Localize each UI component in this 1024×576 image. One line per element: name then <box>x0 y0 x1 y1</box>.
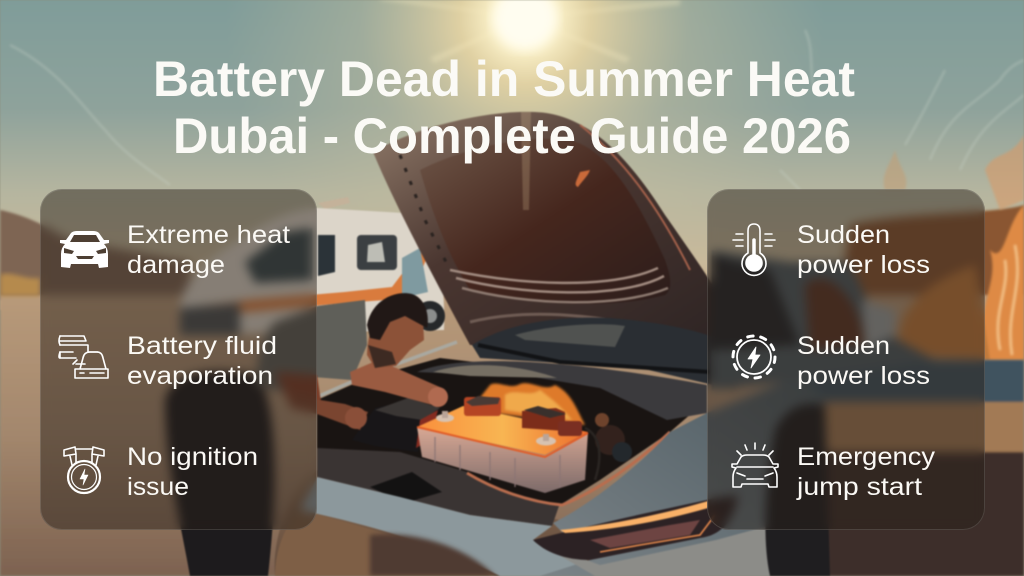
lower engine compartment <box>317 445 560 526</box>
text: battery fluid evaporation <box>127 332 277 390</box>
text: battery fluid evaporation: evaporation <box>127 362 273 390</box>
engine fire <box>470 383 585 425</box>
left brush fire <box>0 274 40 296</box>
glowing battery <box>417 396 588 493</box>
text: sudden power loss <box>797 332 930 390</box>
engine bay <box>317 358 707 505</box>
mechanic <box>165 293 448 576</box>
text: sudden power loss: Sudden <box>797 221 890 249</box>
cowl highlight <box>433 365 557 378</box>
text: extreme heat damage: damage <box>127 251 225 279</box>
left panel <box>40 189 317 530</box>
text: emergency jump start: Emergency <box>797 443 936 471</box>
right fender <box>540 375 825 576</box>
text: extreme heat damage: Extreme heat <box>127 221 290 249</box>
left fender rim <box>317 342 457 397</box>
icon: battery fluid and car <box>59 336 108 378</box>
lower front corner <box>533 520 800 576</box>
icon: thermometer <box>733 224 775 275</box>
right flames <box>884 135 1024 360</box>
text: emergency jump start: jump start <box>796 473 922 501</box>
trousers <box>165 371 274 576</box>
icon: ignition stopwatch <box>64 447 104 493</box>
text: extreme heat damage <box>127 221 290 279</box>
windshield glare <box>515 324 625 347</box>
arm right <box>350 360 442 406</box>
icon: car front <box>60 231 109 268</box>
old black battery <box>352 398 440 452</box>
sleeve arm <box>275 372 322 408</box>
sun glow <box>0 0 1024 330</box>
lower inset <box>370 472 442 503</box>
shirt <box>255 300 367 395</box>
text: no ignition issue: No ignition <box>127 443 258 471</box>
right side of car <box>712 250 935 390</box>
title: Battery Dead in Summer Heat <box>153 51 855 107</box>
text: sudden power loss: Sudden <box>797 332 890 360</box>
bumper tan reflection <box>275 510 495 576</box>
windshield <box>472 318 735 390</box>
title: Dubai - Complete Guide 2026 <box>173 108 851 164</box>
text: no ignition issue: issue <box>127 473 189 501</box>
orange rim highlight <box>467 432 670 505</box>
smoke wisps <box>10 30 1024 190</box>
right teal band and lower ground <box>790 360 1024 576</box>
distant hills <box>0 205 1024 360</box>
beard <box>368 345 396 368</box>
wipers <box>478 345 710 372</box>
front bumper silver band <box>300 477 600 576</box>
text: no ignition issue <box>127 443 258 501</box>
face <box>367 312 424 368</box>
engine components <box>585 413 632 480</box>
text: sudden power loss <box>797 221 930 279</box>
text: sudden power loss: power loss <box>797 251 930 279</box>
text: sudden power loss: power loss <box>797 362 930 390</box>
lower bumper tan body <box>275 470 600 576</box>
right panel <box>707 189 985 530</box>
forearm left <box>290 395 368 430</box>
headlight <box>533 495 738 560</box>
icon: gear with bolt <box>733 336 775 378</box>
ambulance <box>180 197 445 335</box>
cowl <box>417 361 707 420</box>
raised car hood <box>373 112 752 355</box>
bumper shadow <box>370 534 495 576</box>
wheel arch <box>765 404 830 576</box>
desert ground <box>0 295 1024 576</box>
text: battery fluid evaporation: Battery fluid <box>127 332 277 360</box>
text: emergency jump start <box>796 443 936 501</box>
icon: car with emergency rays <box>732 443 778 487</box>
sky background <box>0 0 1024 310</box>
hair <box>367 293 428 340</box>
